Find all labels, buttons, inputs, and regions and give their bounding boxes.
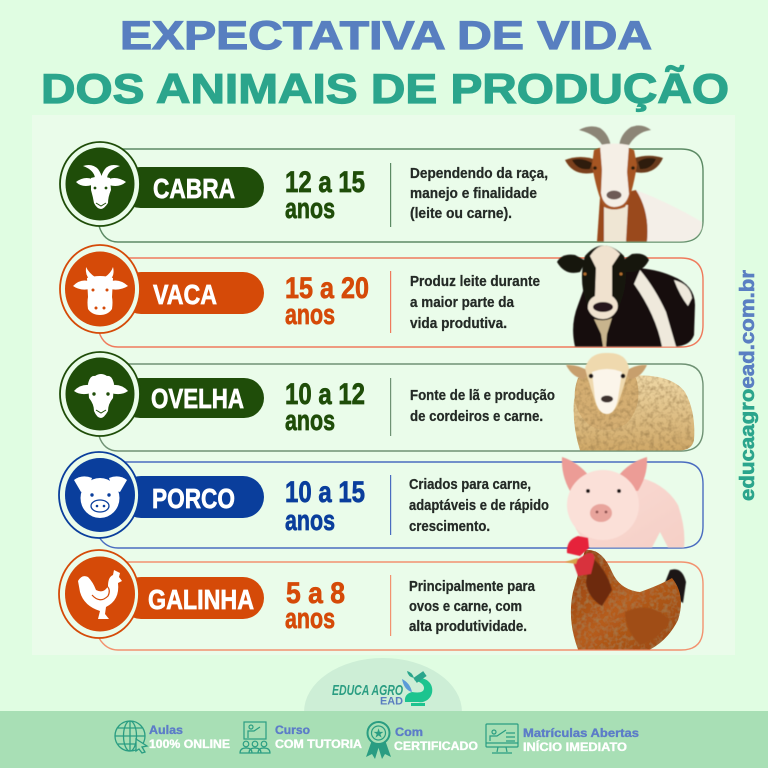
pill xyxy=(120,167,264,208)
footer item: certificado: CERTIFICADO xyxy=(394,739,478,753)
description: Fonte de lã e produção xyxy=(410,388,555,404)
card outline xyxy=(99,258,703,347)
row: ovelha xyxy=(0,270,768,768)
lifespan xyxy=(285,378,365,437)
image: goat xyxy=(565,126,702,242)
lifespan: anos xyxy=(285,299,335,331)
description: a maior parte da xyxy=(410,295,515,311)
description: ovos e carne, com xyxy=(409,599,522,615)
card outline xyxy=(99,562,703,650)
icon: monitor xyxy=(486,724,518,753)
lifespan: anos xyxy=(285,603,335,635)
divider xyxy=(390,163,391,227)
side url: educaagroead.com.br xyxy=(737,270,759,501)
badge circle xyxy=(59,452,139,538)
lifespan: 10 a 12 xyxy=(285,378,365,411)
badge circle xyxy=(60,245,140,333)
description xyxy=(409,477,549,535)
icon: ribbon medal: ★ xyxy=(374,728,384,740)
icon: pig head xyxy=(74,476,127,518)
lifespan xyxy=(285,166,365,225)
head xyxy=(566,353,647,414)
card outline xyxy=(99,364,703,451)
description xyxy=(409,579,536,635)
label: GALINHA xyxy=(148,584,254,615)
description: Principalmente para xyxy=(409,579,536,595)
row: porco xyxy=(59,452,703,548)
row: vaca xyxy=(60,245,703,347)
lifespan: anos xyxy=(285,505,335,537)
description xyxy=(410,166,548,222)
description: Criados para carne, xyxy=(409,477,531,493)
badge circle xyxy=(59,550,139,638)
footer item: aulas: 100% ONLINE xyxy=(149,737,230,751)
logo xyxy=(332,671,432,708)
description: Produz leite durante xyxy=(410,274,540,290)
image: hen xyxy=(565,536,686,650)
icon: hen xyxy=(78,570,122,619)
card outline xyxy=(99,462,703,548)
lifespan: 10 a 15 xyxy=(285,476,365,509)
tail feathers xyxy=(662,569,686,603)
lifespan: anos xyxy=(285,193,335,225)
lifespan xyxy=(285,577,345,635)
title xyxy=(41,14,729,112)
icon: microscope xyxy=(402,671,432,706)
icon: cow head xyxy=(73,267,128,315)
description: (leite ou carne). xyxy=(410,206,512,222)
card outline xyxy=(99,149,703,242)
label: OVELHA xyxy=(151,383,244,414)
pill xyxy=(120,378,264,418)
description: vida produtiva. xyxy=(410,316,507,332)
footer item: matriculas xyxy=(486,724,639,754)
footer item: certificado xyxy=(366,722,478,759)
pill xyxy=(120,476,264,518)
footer band xyxy=(0,711,768,768)
label: CABRA xyxy=(153,173,235,204)
footer item: curso xyxy=(240,722,362,753)
lifespan: 5 a 8 xyxy=(286,577,345,610)
logo wordmark: EDUCA AGRO xyxy=(332,682,403,699)
description: manejo e finalidade xyxy=(410,186,537,202)
description xyxy=(410,274,540,332)
badge circle xyxy=(60,142,140,226)
description: Dependendo da raça, xyxy=(410,166,548,182)
title line 2: DOS ANIMAIS DE PRODUÇÃO xyxy=(41,65,729,112)
divider xyxy=(390,575,391,636)
text: Com xyxy=(395,725,423,739)
title line 1: EXPECTATIVA DE VIDA xyxy=(120,14,652,58)
logo subtitle: EAD xyxy=(380,696,403,708)
description: adaptáveis e de rápido xyxy=(409,498,549,514)
pill xyxy=(120,272,264,314)
image: cow xyxy=(557,245,695,346)
pill xyxy=(120,577,264,619)
neck wool xyxy=(575,370,638,430)
divider xyxy=(390,475,391,535)
lifespan: 12 a 15 xyxy=(285,166,365,199)
description xyxy=(410,388,555,425)
lifespan xyxy=(285,476,365,537)
image: sheep xyxy=(566,353,694,450)
divider xyxy=(390,271,391,333)
icon: sheep head xyxy=(74,374,128,418)
icon: goat head xyxy=(76,165,126,209)
lifespan: 15 a 20 xyxy=(285,272,369,305)
image: pig xyxy=(562,457,684,548)
icon: globe xyxy=(115,721,147,753)
description: alta produtividade. xyxy=(409,619,527,635)
description: crescimento. xyxy=(409,519,490,535)
footer item: aulas xyxy=(115,721,230,753)
footer item: matriculas: INÍCIO IMEDIATO xyxy=(523,739,627,754)
logo dome xyxy=(304,658,462,712)
text: Curso xyxy=(275,723,310,737)
text: Aulas xyxy=(149,723,183,737)
footer item: curso: COM TUTORIA xyxy=(275,737,362,751)
main panel xyxy=(32,115,735,655)
label: PORCO xyxy=(152,483,235,514)
description: de cordeiros e carne. xyxy=(410,409,543,425)
label: VACA xyxy=(153,279,217,310)
lifespan: anos xyxy=(285,405,335,437)
body xyxy=(571,550,681,650)
text: Matrículas Abertas xyxy=(523,726,639,740)
icon: tutor and class xyxy=(240,722,270,753)
row: galinha xyxy=(0,270,768,768)
divider xyxy=(390,378,391,436)
wool body xyxy=(574,375,694,450)
badge circle xyxy=(60,352,140,436)
row: cabra xyxy=(60,126,703,242)
lifespan xyxy=(285,272,369,331)
head and neck xyxy=(565,536,670,645)
